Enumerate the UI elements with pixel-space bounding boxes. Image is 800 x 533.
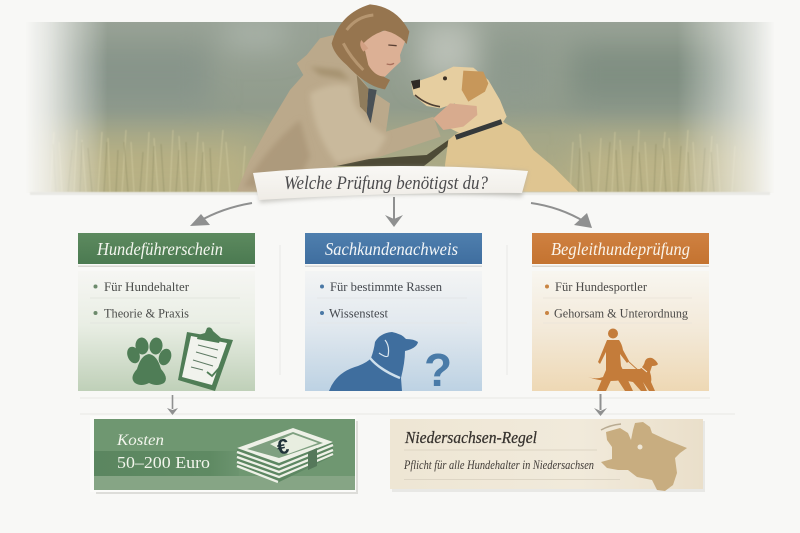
list: Sachkundenachweis points: Wissenstest	[329, 306, 388, 320]
connector lines	[80, 398, 735, 414]
arrow: to Hundeführerschein	[190, 203, 252, 226]
hair	[332, 4, 409, 89]
icon: stack of euro banknotes	[237, 428, 333, 483]
panel: Hundeführerschein	[78, 233, 255, 391]
soft fade under the photo	[30, 192, 770, 195]
meadow grass strokes	[50, 130, 735, 192]
list: Sachkundenachweis points	[317, 279, 467, 323]
text: Kosten: Kosten	[116, 432, 164, 449]
list: Hundeführerschein points	[90, 279, 240, 323]
arrow: to Niedersachsen-Regel	[594, 394, 607, 416]
header: Sachkundenachweis	[305, 233, 482, 264]
icon: stack of euro banknotes: €	[275, 435, 291, 460]
arrow: to Sachkundenachweis	[385, 197, 403, 227]
hand	[433, 103, 477, 130]
text: description: Pflicht für alle Hundehalter in Niedersachsen	[403, 458, 594, 472]
list: Begleithundeprüfung points: Für Hundesportler	[555, 279, 648, 294]
list: Hundeführerschein points: Theorie & Praxis	[104, 306, 189, 320]
banner: question	[253, 166, 528, 203]
list: Begleithundeprüfung points	[543, 279, 692, 323]
header: Begleithundeprüfung	[532, 233, 709, 264]
icon: map of Lower Saxony	[601, 422, 687, 491]
list: Begleithundeprüfung points: Gehorsam & Unterordnung	[554, 306, 688, 320]
arrow: to Begleithundeprüfung	[531, 203, 592, 228]
text: 50–200 Euro: 50–200 Euro	[117, 453, 210, 472]
panel: Niedersachsen-Regel	[390, 419, 705, 492]
column separators	[280, 245, 507, 375]
icon: clipboard	[178, 327, 233, 391]
hero photo: woman with dog in a meadow	[25, 4, 775, 200]
header: Sachkundenachweis: Sachkundenachweis	[325, 239, 458, 259]
body	[78, 271, 255, 391]
dog	[411, 67, 578, 192]
panel: Kosten	[90, 416, 358, 494]
icon: dog silhouette with question mark: ?	[424, 344, 452, 396]
header: Hundeführerschein: Hundeführerschein	[96, 239, 223, 259]
face	[363, 31, 405, 77]
header: Begleithundeprüfung: Begleithundeprüfung	[551, 239, 690, 259]
body	[305, 271, 482, 391]
header: Hundeführerschein	[78, 233, 255, 264]
list: Hundeführerschein points: Für Hundehalter	[104, 279, 190, 294]
icon: dog silhouette with question mark	[329, 332, 452, 396]
body	[532, 271, 709, 391]
arrow: to Kosten	[167, 395, 178, 415]
panel: Sachkundenachweis	[305, 233, 482, 396]
list: Sachkundenachweis points: Für bestimmte Rassen	[330, 279, 442, 294]
banner text: Welche Prüfung benötigst du?	[284, 173, 488, 194]
panel: Begleithundeprüfung	[532, 233, 709, 391]
icon: person walking dog	[588, 328, 658, 391]
woman	[237, 4, 453, 192]
icon: paw	[125, 337, 174, 385]
text: heading: Niedersachsen-Regel	[404, 428, 537, 447]
